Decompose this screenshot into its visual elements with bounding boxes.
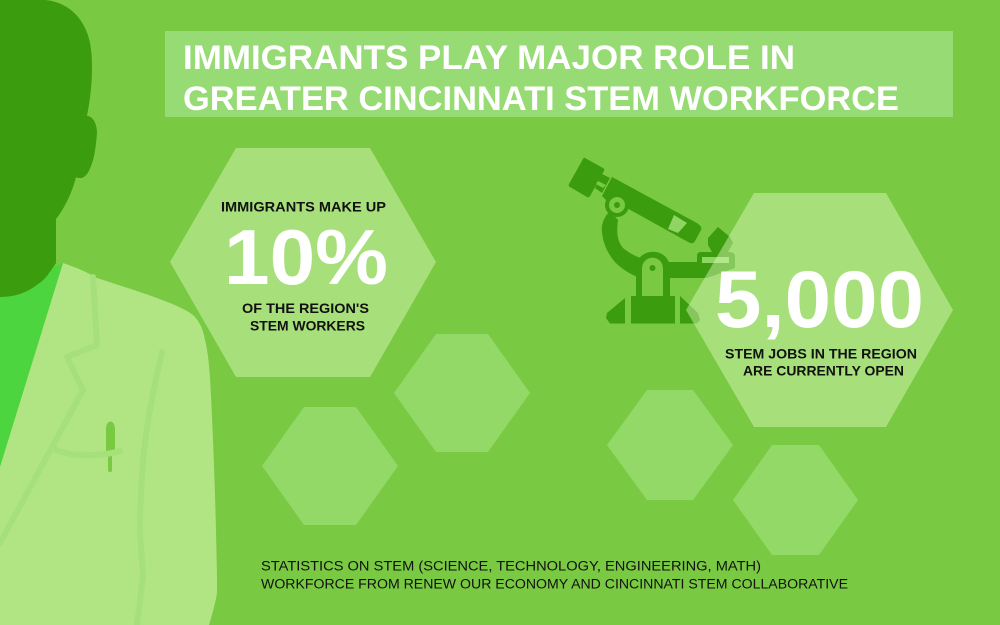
source note: STATISTICS ON STEM (SCIENCE, TECHNOLOGY, ENGINEERING, MATH) xyxy=(261,558,761,574)
hexagon xyxy=(686,193,953,427)
caption: OF THE REGION'S xyxy=(242,300,369,316)
caption: STEM JOBS IN THE REGION xyxy=(725,346,917,362)
panel: 5,000 open jobs xyxy=(686,193,953,427)
title banner: GREATER CINCINNATI STEM WORKFORCE xyxy=(183,80,899,118)
stage slot xyxy=(702,257,729,263)
coat seams xyxy=(0,277,162,625)
panel: 5,000 open jobs: ARE CURRENTLY OPEN xyxy=(743,362,904,378)
big number: 10% xyxy=(224,213,388,301)
base xyxy=(631,296,675,324)
hexagon xyxy=(170,148,436,377)
source note: WORKFORCE FROM RENEW OUR ECONOMY AND CINCINNATI STEM COLLABORATIVE xyxy=(261,576,848,592)
stage knob xyxy=(708,227,733,252)
lead text: IMMIGRANTS MAKE UP xyxy=(221,198,386,214)
arm xyxy=(602,211,641,278)
figure: scientist silhouette xyxy=(0,0,217,625)
eyepiece xyxy=(569,158,604,197)
eyepiece connector xyxy=(595,174,610,193)
lab coat xyxy=(0,263,217,625)
icon: microscope xyxy=(569,158,735,324)
decorative hexagons xyxy=(262,334,858,555)
stage arm xyxy=(665,252,735,278)
focus knob xyxy=(605,193,629,217)
pen xyxy=(106,422,115,472)
panel: immigrants 10 percent: STEM WORKERS xyxy=(250,318,365,334)
tube xyxy=(602,177,701,243)
panel: immigrants 10 percent xyxy=(170,148,436,377)
title banner xyxy=(165,31,953,118)
big number: 5,000 xyxy=(715,255,924,345)
shirt xyxy=(0,263,63,467)
post xyxy=(636,252,670,298)
source note xyxy=(261,558,848,592)
head silhouette xyxy=(0,0,97,297)
title text: IMMIGRANTS PLAY MAJOR ROLE IN xyxy=(183,39,795,77)
tube window xyxy=(668,215,687,233)
